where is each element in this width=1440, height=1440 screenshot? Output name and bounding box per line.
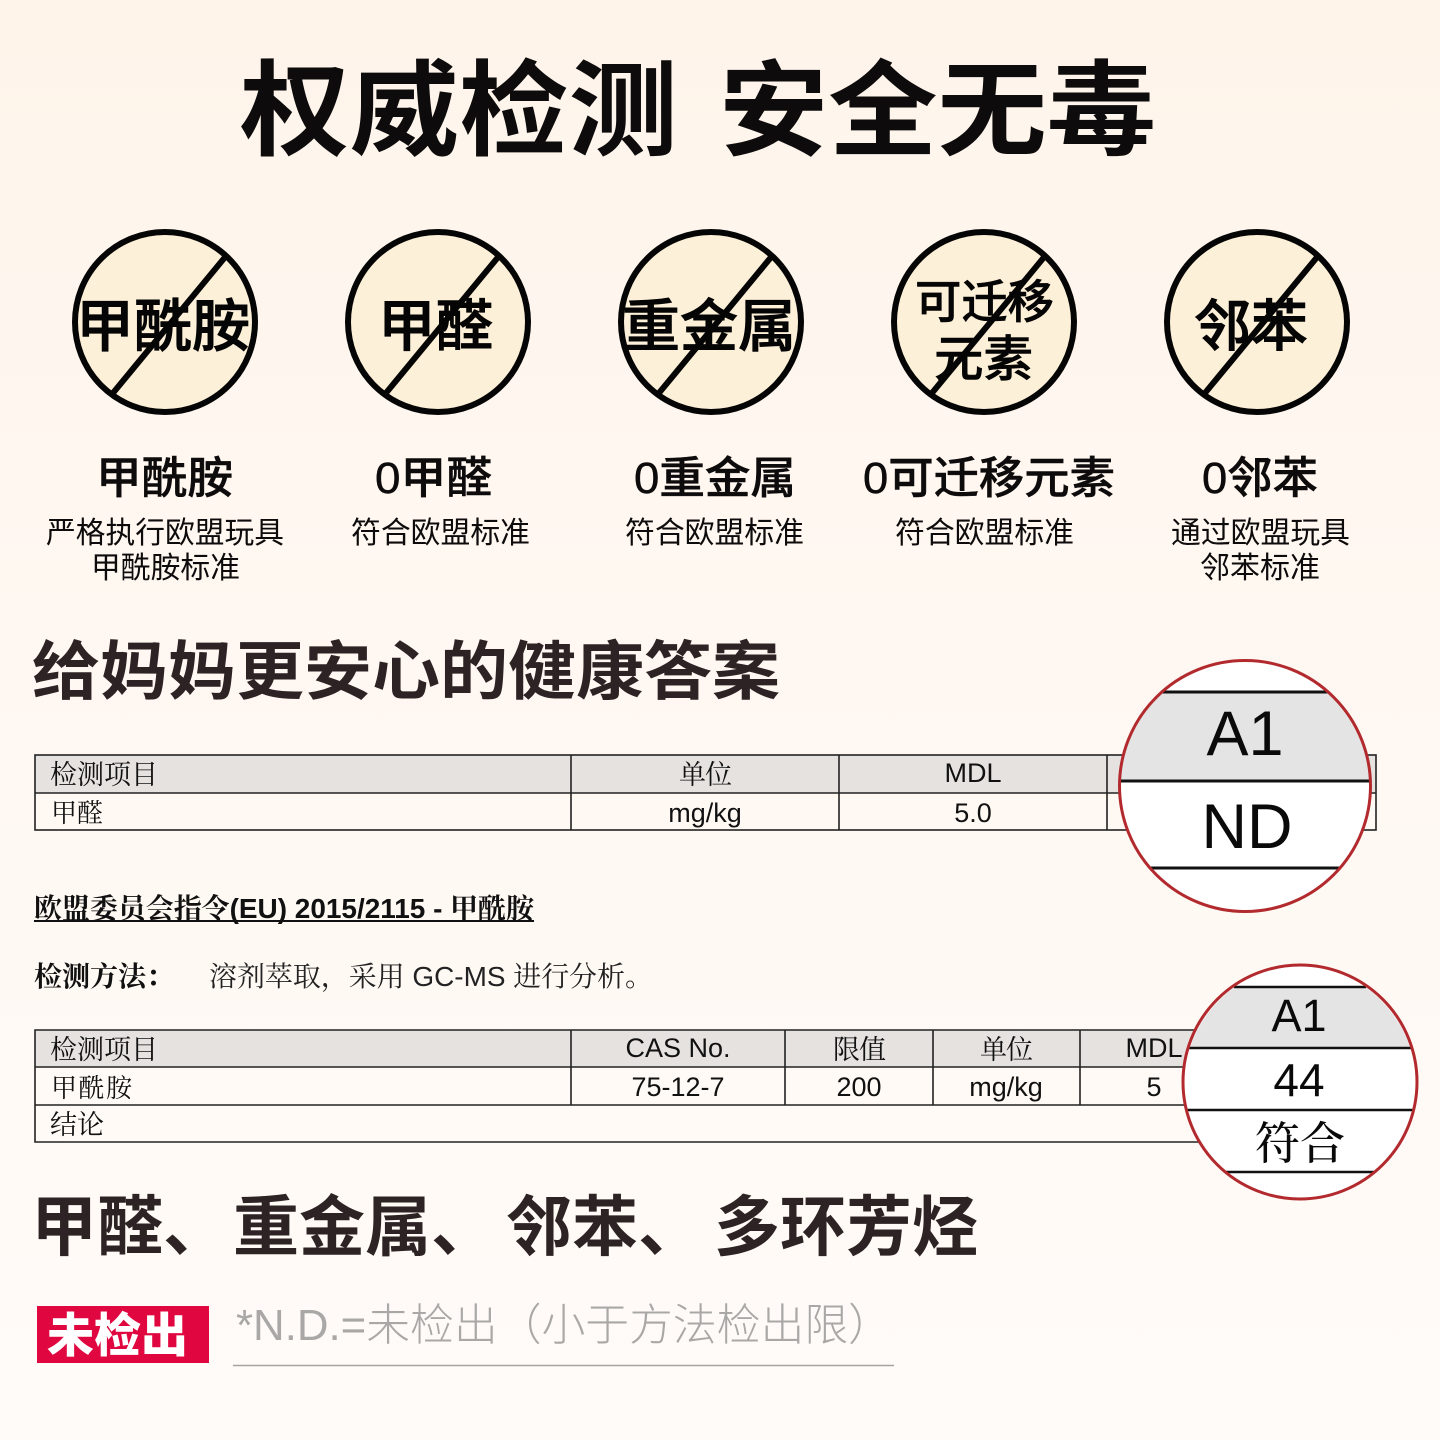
title: 权威检测 bbox=[240, 54, 678, 170]
text: test method: 溶剂萃取，采用 GC-MS 进行分析。 bbox=[209, 961, 653, 992]
callout: magnifier A1 44: A1 bbox=[1271, 990, 1327, 1041]
icon: no formaldehyde: 甲醛 bbox=[378, 295, 493, 358]
caption: acrylamide: 严格执行欧盟玩具 bbox=[46, 517, 284, 550]
icon: no formaldehyde bbox=[348, 232, 528, 412]
table: acrylamide results: 检测项目 bbox=[50, 1035, 158, 1065]
table: acrylamide results: 单位 bbox=[980, 1035, 1033, 1065]
title bbox=[240, 54, 1156, 170]
callout: magnifier A1 ND bbox=[1120, 660, 1370, 912]
icon: no phthalates bbox=[1167, 232, 1347, 412]
icon: no heavy metals bbox=[621, 232, 801, 412]
table: formaldehyde results bbox=[35, 755, 1376, 830]
heading: substance list: 邻苯、 bbox=[506, 1190, 704, 1264]
badge: not detected: 未检出 bbox=[47, 1309, 188, 1362]
table: formaldehyde results: 检测项目 bbox=[50, 760, 158, 790]
table: acrylamide results: 75-12-7 bbox=[631, 1072, 725, 1102]
heading: substance list: 重金属、 bbox=[233, 1190, 497, 1264]
icon: no acrylamide: 甲酰胺 bbox=[76, 295, 250, 359]
table: acrylamide results: 结论 bbox=[50, 1110, 104, 1140]
caption: phthalates bbox=[1171, 454, 1350, 585]
text: test method: 检测方法： bbox=[34, 961, 174, 992]
caption: migratable elements: 0可迁移元素 bbox=[863, 454, 1115, 503]
heading: substance list: 甲醛、 bbox=[31, 1190, 229, 1264]
caption: formaldehyde: 符合欧盟标准 bbox=[351, 517, 530, 550]
note: N.D. definition: *N.D.=未检出（小于方法检出限） bbox=[236, 1301, 892, 1350]
table: acrylamide results bbox=[35, 1030, 1200, 1142]
table: formaldehyde results: 单位 bbox=[679, 760, 732, 790]
table: acrylamide results: MDL bbox=[1125, 1033, 1183, 1063]
caption: heavy metals: 符合欧盟标准 bbox=[625, 517, 804, 550]
icon: no migratable elements: 可迁移 bbox=[915, 276, 1054, 328]
table: formaldehyde results: 5.0 bbox=[954, 798, 992, 828]
table: acrylamide results: CAS No. bbox=[625, 1033, 731, 1063]
panel: prohibited substance icons bbox=[75, 232, 1347, 412]
table: formaldehyde results: 甲醛 bbox=[51, 798, 103, 828]
panel: substance captions bbox=[46, 454, 1350, 585]
caption: formaldehyde: 0甲醛 bbox=[375, 454, 492, 503]
caption: heavy metals: 0重金属 bbox=[634, 454, 796, 503]
callout: magnifier A1 ND: ND bbox=[1202, 792, 1292, 862]
callout: magnifier A1 44: 44 bbox=[1273, 1054, 1325, 1106]
caption: formaldehyde bbox=[351, 454, 530, 550]
caption: heavy metals bbox=[625, 454, 804, 550]
callout: magnifier A1 ND: A1 bbox=[1206, 699, 1284, 769]
caption: migratable elements: 符合欧盟标准 bbox=[895, 517, 1074, 550]
icon: no phthalates: 邻苯 bbox=[1194, 295, 1308, 358]
table: formaldehyde results: mg/kg bbox=[668, 798, 742, 828]
table: acrylamide results: 200 bbox=[836, 1072, 882, 1102]
icon: no migratable elements bbox=[894, 232, 1074, 412]
heading: substance list: 多环芳烃 bbox=[714, 1190, 978, 1264]
title: 安全无毒 bbox=[719, 54, 1156, 170]
table: acrylamide results: 5 bbox=[1146, 1072, 1162, 1102]
caption: phthalates: 通过欧盟玩具 bbox=[1171, 517, 1350, 550]
caption: phthalates: 0邻苯 bbox=[1202, 454, 1318, 503]
callout: magnifier A1 44: 符合 bbox=[1255, 1118, 1345, 1169]
table: acrylamide results: 甲酰胺 bbox=[51, 1073, 133, 1103]
table: formaldehyde results: MDL bbox=[944, 758, 1002, 788]
caption: acrylamide: 甲酰胺标准 bbox=[91, 552, 240, 585]
text: EU directive title: 欧盟委员会指令(EU) 2015/2115 - 甲酰胺 bbox=[34, 893, 535, 924]
caption: acrylamide: 甲酰胺 bbox=[96, 454, 233, 503]
caption: acrylamide bbox=[46, 454, 284, 585]
callout: magnifier A1 44 bbox=[1183, 965, 1417, 1199]
table: acrylamide results: 限值 bbox=[833, 1035, 886, 1065]
icon: no acrylamide bbox=[75, 232, 255, 412]
table: acrylamide results: mg/kg bbox=[969, 1072, 1043, 1102]
caption: phthalates: 邻苯标准 bbox=[1200, 552, 1320, 585]
heading: reassurance: 给妈妈更安心的健康答案 bbox=[32, 636, 780, 708]
caption: migratable elements bbox=[863, 454, 1115, 550]
icon: no heavy metals: 重金属 bbox=[622, 295, 796, 359]
icon: no migratable elements: 元素 bbox=[934, 333, 1033, 387]
